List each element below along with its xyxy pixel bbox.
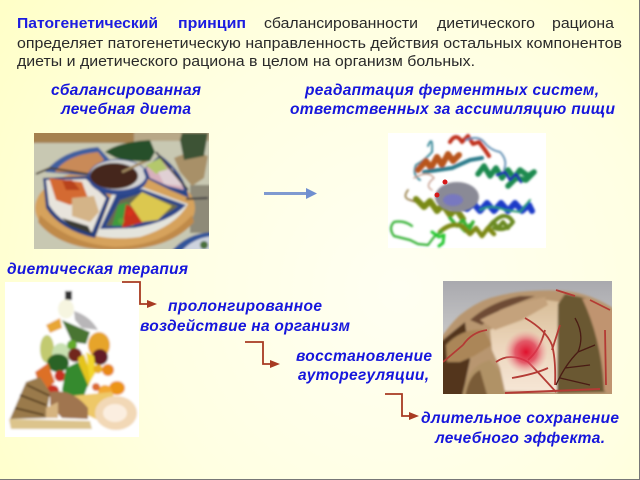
text: lasting therapeutic effect: лечебного эффекта.	[434, 430, 605, 447]
text: prolonged effect: пролонгированное	[168, 298, 322, 315]
heading: enzyme readaptation: ответственных за ассимиляцию пищи	[290, 101, 616, 118]
intro paragraph: рациона	[552, 16, 615, 32]
heading: enzyme readaptation: реадаптация ферментных систем,	[304, 82, 599, 99]
intro paragraph: определяет патогенетическую направленность действия остальных компонентов	[17, 36, 622, 52]
image: brain with vessels	[438, 281, 616, 398]
intro paragraph: диетического	[437, 16, 535, 32]
text: prolonged effect	[140, 298, 351, 335]
text: prolonged effect: воздействие на организм	[140, 318, 351, 335]
heading: balanced diet: сбалансированная	[51, 82, 201, 99]
label: dietary therapy: диетическая терапия	[7, 261, 188, 278]
image: food pyramid	[5, 282, 139, 437]
text: lasting therapeutic effect	[421, 410, 619, 447]
text: lasting therapeutic effect: длительное сохранение	[421, 410, 619, 427]
text: autoregulation recovery: восстановление	[296, 348, 432, 365]
heading: balanced diet: лечебная диета	[60, 101, 191, 118]
arrow: therapy to prolonged effect	[122, 282, 157, 308]
intro paragraph: Патогенетический	[17, 16, 158, 32]
text: autoregulation recovery	[296, 348, 432, 384]
arrow: prolonged effect to autoregulation	[245, 342, 280, 368]
arrow: from diet to enzymes	[264, 188, 317, 199]
intro paragraph: принцип	[178, 16, 246, 32]
text: autoregulation recovery: ауторегуляции,	[298, 367, 429, 384]
heading: balanced diet	[51, 82, 201, 118]
intro paragraph	[17, 16, 622, 70]
image: food platter	[30, 130, 213, 253]
intro paragraph: диеты и диетического рациона в целом на организм больных.	[17, 54, 475, 70]
heading: enzyme readaptation	[290, 82, 616, 118]
image: enzyme protein ribbon	[388, 133, 546, 248]
intro paragraph: сбалансированности	[264, 16, 418, 32]
arrow: autoregulation to lasting effect	[385, 394, 419, 420]
